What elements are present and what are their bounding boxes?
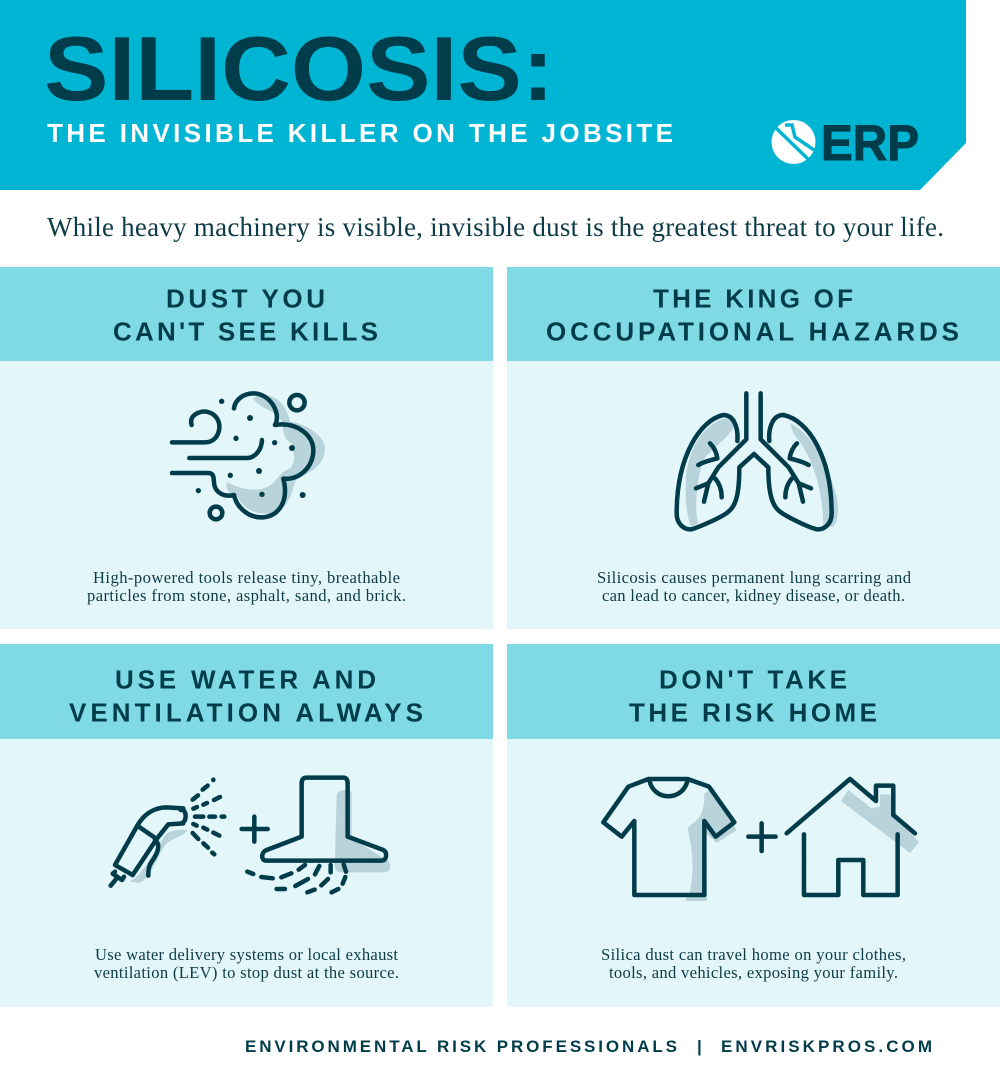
intro sentence: While heavy machinery is visible, invisible dust is the greatest threat to your life. bbox=[47, 212, 944, 242]
icon: dust cloud bbox=[172, 393, 325, 519]
heading: dust: DUST YOU bbox=[166, 284, 325, 314]
panel: use water and ventilation always bbox=[0, 644, 493, 1007]
body text: king: Silicosis causes permanent lung scarring and bbox=[597, 568, 912, 587]
body text: home bbox=[601, 945, 906, 982]
body text: home: tools, and vehicles, exposing your family. bbox=[609, 963, 898, 982]
heading: water: VENTILATION ALWAYS bbox=[69, 698, 423, 728]
header banner bbox=[0, 0, 966, 190]
heading: home: DON'T TAKE bbox=[659, 664, 847, 694]
body text: dust bbox=[87, 568, 406, 605]
heading: home bbox=[629, 664, 877, 728]
body text: home: Silica dust can travel home on your clothes, bbox=[601, 945, 906, 964]
logo: ERP bbox=[772, 115, 919, 171]
heading: king bbox=[546, 284, 959, 346]
icon: lungs bbox=[677, 393, 838, 529]
heading: water bbox=[69, 664, 423, 728]
logo: ERP: ERP bbox=[821, 115, 919, 171]
heading: king: THE KING OF bbox=[653, 284, 853, 314]
footer: ENVRISKPROS.COM bbox=[721, 1037, 932, 1056]
icon: t-shirt plus house bbox=[603, 779, 919, 901]
footer bbox=[245, 1037, 932, 1056]
body text: dust: High-powered tools release tiny, breathable bbox=[93, 568, 400, 587]
body text: king bbox=[597, 568, 912, 605]
panel: dust you can't see kills bbox=[0, 267, 493, 629]
body text: king: can lead to cancer, kidney disease, or death. bbox=[602, 586, 905, 605]
heading: king: OCCUPATIONAL HAZARDS bbox=[546, 316, 959, 346]
subtitle: THE INVISIBLE KILLER ON THE JOBSITE bbox=[47, 118, 673, 148]
panel: don't take the risk home bbox=[507, 644, 1000, 1007]
heading: dust bbox=[113, 284, 378, 346]
footer: ENVIRONMENTAL RISK PROFESSIONALS bbox=[245, 1037, 677, 1056]
body text: dust: particles from stone, asphalt, sand, and brick. bbox=[87, 586, 406, 605]
body text: water bbox=[94, 945, 399, 982]
icon: spray nozzle plus exhaust hood bbox=[111, 778, 390, 892]
heading: home: THE RISK HOME bbox=[629, 698, 877, 728]
body text: water: Use water delivery systems or local exhaust bbox=[95, 945, 398, 964]
panel: the king of occupational hazards bbox=[507, 267, 1000, 629]
heading: dust: CAN'T SEE KILLS bbox=[113, 316, 378, 346]
heading: water: USE WATER AND bbox=[115, 664, 376, 694]
title: SILICOSIS: bbox=[44, 19, 554, 120]
body text: water: ventilation (LEV) to stop dust at the source. bbox=[94, 963, 399, 982]
footer: | bbox=[697, 1037, 702, 1056]
